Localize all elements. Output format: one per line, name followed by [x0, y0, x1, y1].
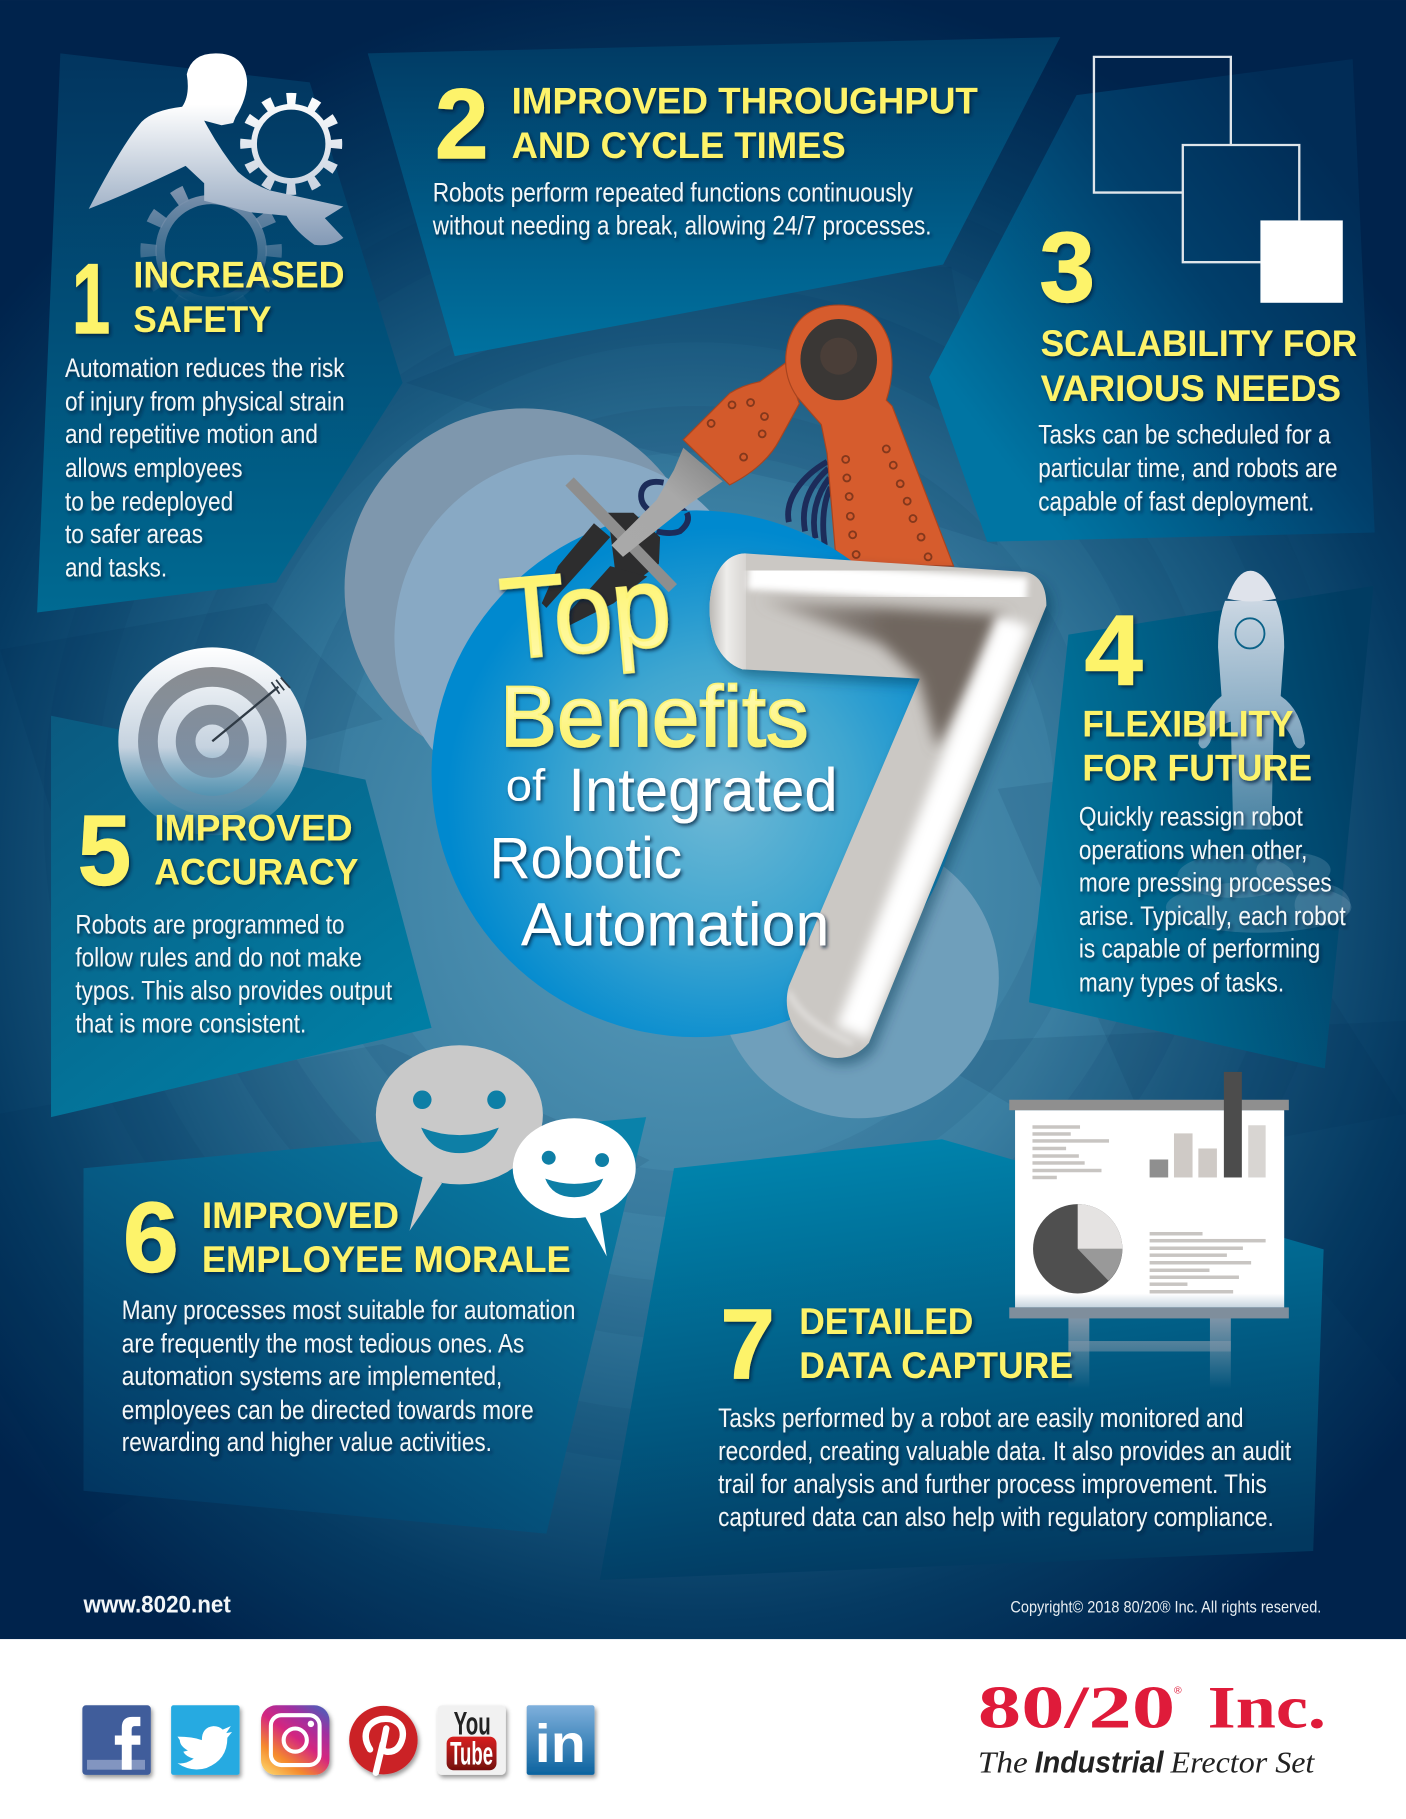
gripper claws — [542, 513, 660, 626]
social icons — [82, 1705, 595, 1775]
tagline: Industrial — [1035, 1747, 1164, 1780]
benefit 6: employee morale: automation systems are implemented, — [122, 1361, 502, 1391]
title: of: of — [506, 761, 546, 810]
numeral body — [709, 553, 1046, 1058]
benefit 7: data capture: DATA CAPTURE — [799, 1344, 1073, 1386]
icon: speech bubbles — [376, 1045, 636, 1256]
benefit 4: flexibility: FLEXIBILITY — [1082, 703, 1294, 745]
benefit 1: increased safety: of injury from physical strain — [65, 387, 345, 417]
tagline: Erector Set — [1169, 1746, 1315, 1780]
big silver numeral 7 — [702, 545, 1052, 1065]
bar chart — [1150, 1072, 1266, 1177]
icon: youtube — [437, 1705, 506, 1775]
benefit 7: data capture — [718, 1289, 1292, 1532]
benefit 3: scalability: capable of fast deployment. — [1038, 486, 1314, 516]
benefit 1: increased safety: Automation reduces the risk — [65, 353, 345, 383]
icon: scaling squares — [1094, 57, 1343, 303]
icon: instagram — [261, 1705, 329, 1775]
benefit 4: flexibility: more pressing processes — [1079, 868, 1332, 898]
icon: facebook — [82, 1705, 151, 1775]
benefit 1: increased safety: to safer areas — [65, 519, 203, 549]
benefit 1: increased safety: and repetitive motion and — [65, 419, 318, 449]
benefit 1: increased safety: allows employees — [65, 453, 242, 483]
arrow — [212, 677, 290, 741]
benefit 2: improved throughput: Robots perform repeated functions continuously — [433, 177, 914, 207]
benefit 3: scalability — [1038, 213, 1357, 516]
panel 6 background — [84, 1117, 646, 1534]
benefit 2: improved throughput: without needing a break, allowing 24/7 processes. — [432, 210, 932, 240]
benefit 1: increased safety — [65, 244, 345, 583]
icon: presentation board — [1009, 1072, 1289, 1389]
logo: 80/20 Inc.: Inc. — [1208, 1674, 1326, 1741]
rear cables — [788, 462, 831, 545]
benefit 3: scalability: VARIOUS NEEDS — [1041, 367, 1341, 409]
upper gear — [246, 99, 336, 189]
rocket body — [1198, 601, 1305, 829]
benefit 7: data capture: 7 — [720, 1289, 775, 1400]
forearm — [786, 305, 954, 566]
wrist cone — [611, 448, 723, 557]
joint disc — [800, 319, 877, 400]
panel 4 background — [1029, 586, 1374, 1068]
rocket smoke — [1166, 853, 1351, 933]
title — [490, 542, 838, 959]
title: Automation: Automation — [521, 890, 829, 959]
robot gripper — [542, 448, 723, 626]
benefit 4: flexibility: 4 — [1085, 595, 1143, 706]
icon: linkedin: in — [535, 1715, 586, 1774]
benefit 4: flexibility: arise. Typically, each robot — [1079, 901, 1346, 931]
benefit 2: improved throughput: IMPROVED THROUGHPUT — [512, 80, 978, 122]
icon: linkedin — [527, 1705, 595, 1775]
benefit 4: flexibility: Quickly reassign robot — [1079, 801, 1303, 831]
benefit 2: improved throughput: 2 — [435, 69, 488, 180]
panel 7 background — [600, 1139, 1324, 1580]
center backdrop circles — [345, 408, 999, 1118]
icon: youtube: You — [454, 1705, 491, 1741]
benefit 6: employee morale: 6 — [123, 1182, 179, 1293]
benefit 6: employee morale: are frequently the most tedious ones. As — [122, 1329, 524, 1359]
benefit 7: data capture: DETAILED — [799, 1300, 973, 1342]
website url: www.8020.net — [83, 1591, 231, 1618]
benefit 7: data capture: Tasks performed by a robot are easily monitored and — [718, 1403, 1244, 1433]
board legs — [1068, 1318, 1231, 1389]
icon: target with arrow — [118, 647, 306, 835]
benefit 1: increased safety: SAFETY — [133, 298, 272, 340]
title: Benefits: Benefits — [500, 669, 809, 765]
logo: 80/20 Inc. — [978, 1674, 1326, 1741]
panel 3 background — [929, 59, 1375, 542]
benefit 6: employee morale: IMPROVED — [202, 1194, 399, 1236]
benefit 2: improved throughput: AND CYCLE TIMES — [512, 124, 846, 166]
benefit 5: accuracy: 5 — [78, 796, 131, 907]
board bottom bar — [1009, 1307, 1289, 1318]
joint hub — [820, 338, 857, 375]
tagline — [978, 1746, 1315, 1780]
benefit 7: data capture: trail for analysis and further process improvement. This — [718, 1469, 1267, 1499]
benefit 1: increased safety: 1 — [72, 244, 110, 355]
benefit 6: employee morale: Many processes most suitable for automation — [122, 1295, 575, 1325]
rocket window — [1235, 618, 1264, 648]
rivets — [708, 399, 932, 560]
icon: pinterest — [349, 1706, 418, 1774]
title: Top: Top — [496, 542, 676, 684]
board surface — [1015, 1110, 1284, 1307]
footer band — [0, 1639, 1406, 1819]
board top bar — [1009, 1100, 1289, 1110]
pie chart — [1033, 1204, 1122, 1293]
gripper cross bar — [570, 481, 673, 588]
benefit 7: data capture: recorded, creating valuable data. It also provides an audit — [718, 1436, 1292, 1466]
rocket nose — [1227, 571, 1276, 602]
benefit 4: flexibility: is capable of performing — [1079, 934, 1320, 964]
icon: youtube: Tube — [450, 1735, 493, 1771]
icon: robot arm — [641, 305, 954, 566]
benefit 5: accuracy — [75, 796, 393, 1038]
numeral shadow — [715, 560, 1052, 1065]
white smiley bubble — [513, 1118, 636, 1256]
benefit 4: flexibility — [1079, 595, 1346, 997]
grey smiley bubble — [376, 1045, 543, 1231]
benefit 1: increased safety: and tasks. — [65, 553, 167, 583]
icon: twitter — [171, 1705, 240, 1775]
benefit 1: increased safety: to be redeployed — [65, 486, 233, 516]
wrist cable loop — [641, 482, 688, 532]
title: Robotic: Robotic — [490, 826, 682, 891]
benefit 5: accuracy: ACCURACY — [154, 851, 359, 893]
panel 1 background — [37, 53, 403, 613]
benefit 5: accuracy: that is more consistent. — [75, 1008, 306, 1038]
logo: 80/20 Inc.: 80/20 — [978, 1674, 1175, 1741]
tagline: The — [978, 1746, 1028, 1780]
icon: worker with gears — [89, 53, 343, 313]
benefit 3: scalability: SCALABILITY FOR — [1041, 322, 1357, 364]
benefit 5: accuracy: follow rules and do not make — [75, 942, 362, 972]
benefit 4: flexibility: operations when other, — [1079, 835, 1307, 865]
benefit 5: accuracy: typos. This also provides output — [75, 975, 393, 1005]
left text lines — [1032, 1125, 1109, 1179]
lower gear — [148, 188, 274, 313]
benefit 3: scalability: Tasks can be scheduled for a — [1038, 420, 1331, 450]
logo: 80/20 Inc.: ® — [1174, 1686, 1182, 1697]
gripper cable — [657, 513, 688, 533]
person silhouette — [89, 53, 343, 245]
benefit 7: data capture: captured data can also help with regulatory compliance. — [718, 1502, 1274, 1532]
benefit 6: employee morale — [122, 1182, 575, 1457]
icon: rocket — [1166, 571, 1351, 933]
benefit 6: employee morale: rewarding and higher value activities. — [122, 1427, 492, 1457]
main blue circle — [432, 510, 961, 1037]
benefit 4: flexibility: many types of tasks. — [1079, 967, 1284, 997]
benefit 6: employee morale: EMPLOYEE MORALE — [202, 1238, 571, 1280]
right text lines — [1150, 1232, 1266, 1293]
benefit 4: flexibility: FOR FUTURE — [1082, 747, 1312, 789]
benefit 6: employee morale: employees can be directed towards more — [122, 1395, 534, 1425]
benefit 5: accuracy: Robots are programmed to — [75, 909, 345, 939]
copyright: Copyright© 2018 80/20® Inc. All rights reserved. — [1010, 1598, 1321, 1616]
benefit 2: improved throughput — [432, 69, 978, 240]
benefit 1: increased safety: INCREASED — [133, 254, 345, 296]
panel 2 background — [368, 37, 1060, 356]
benefit 3: scalability: particular time, and robots are — [1038, 453, 1338, 483]
benefit 5: accuracy: IMPROVED — [154, 806, 353, 848]
title: Integrated: Integrated — [568, 756, 838, 825]
benefit 3: scalability: 3 — [1039, 213, 1095, 324]
panel 5 background — [51, 716, 432, 1117]
lower arm — [683, 363, 799, 485]
